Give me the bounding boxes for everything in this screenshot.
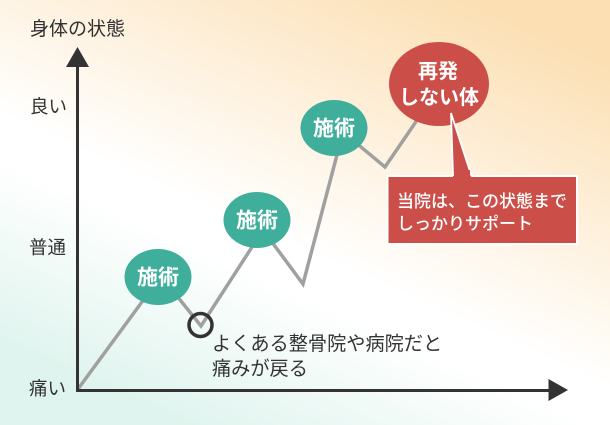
y-axis label: good: 良い [30,96,67,117]
red goal bubble: 再発 [418,60,458,83]
treatment bubble 3: 施術 [313,116,355,140]
red goal bubble: しない体 [399,86,479,109]
axes [66,47,568,401]
body condition line [78,88,439,389]
red callout box: 当院は、この状態まで [397,192,567,211]
treatment bubble 1: 施術 [137,266,179,290]
horizontal arrowhead [548,379,568,401]
y-axis label: pain: 痛い [29,378,66,399]
y-axis label: normal: 普通 [29,237,66,258]
treatment bubble 2 [224,192,290,248]
red goal bubble [389,42,489,126]
treatment bubble 2: 施術 [236,208,278,232]
y-axis title: 身体の状態 [30,18,125,40]
horizontal axis [76,389,551,392]
note text: よくある整骨院や病院だと [212,333,442,355]
red callout box [388,113,577,244]
treatment bubble 1 [124,249,192,305]
treatment bubble 3 [300,100,368,156]
red callout box: しっかりサポート [397,214,533,234]
circle marker [189,314,212,336]
note text: 痛みが戻る [212,358,308,380]
vertical arrowhead [66,47,89,67]
vertical axis [76,64,79,392]
